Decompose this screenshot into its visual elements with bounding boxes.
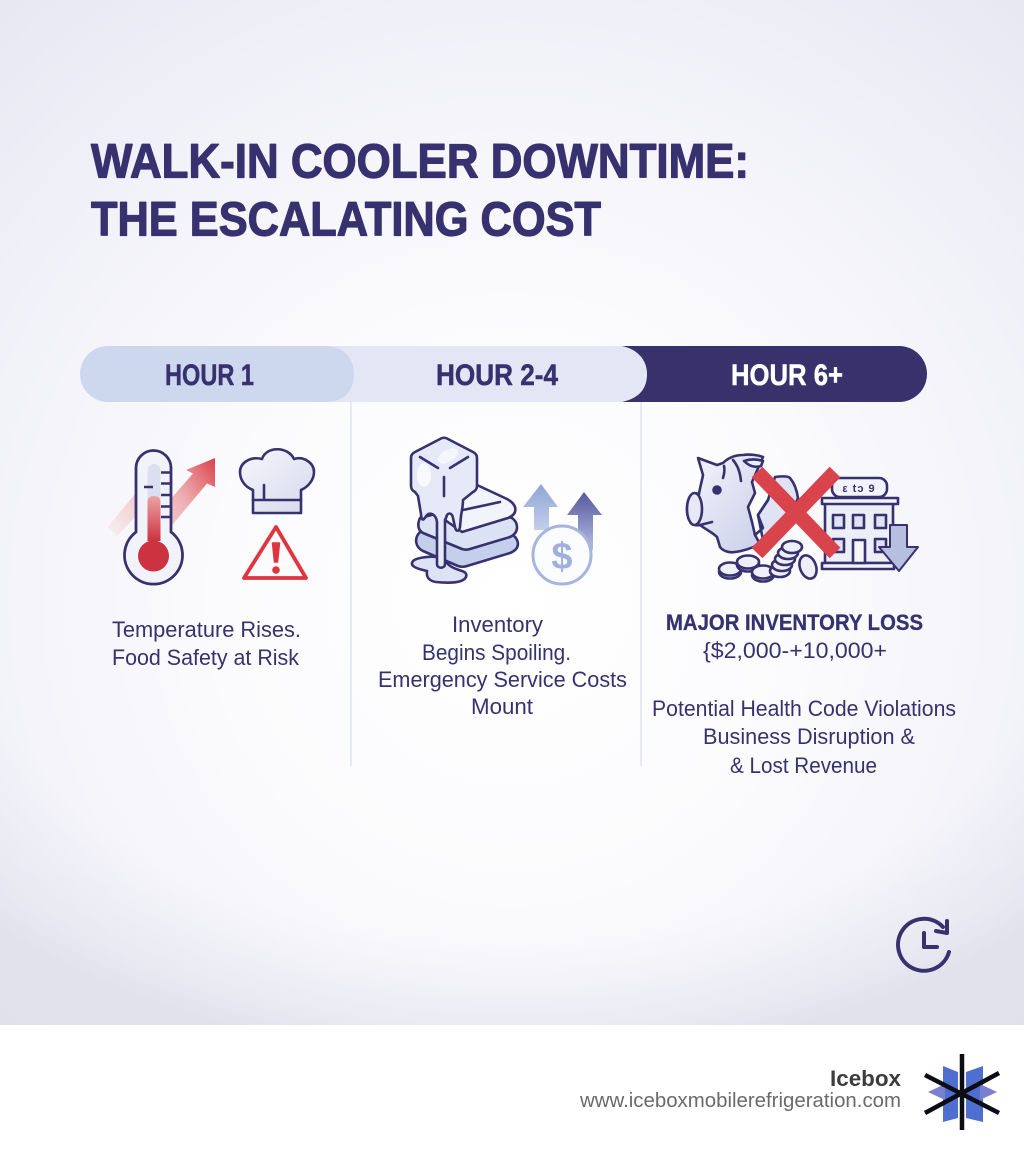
segment: hour 6+ [610, 346, 927, 402]
icon: snowflake logo [925, 1054, 999, 1130]
icon: down arrow [879, 525, 918, 571]
segment: hour 6+: HOUR 6+ [731, 359, 843, 392]
icon: chef hat [240, 449, 314, 513]
segment: hour 1: HOUR 1 [165, 359, 254, 392]
timeline bar [80, 346, 927, 402]
icon: melting ice and spoiling inventory [411, 438, 602, 584]
text: hour 2-4 description: Mount [471, 694, 533, 719]
icon: inventory stack [416, 485, 518, 567]
icon: dollar coin: $ [551, 536, 573, 578]
icon: melting ice cube [411, 438, 477, 568]
icon: warning triangle [244, 527, 306, 578]
icon: puddle [412, 557, 466, 583]
icon: rising arrow [108, 458, 215, 536]
footer website: www.iceboxmobilerefrigeration.com [579, 1090, 901, 1112]
text: hour 6+ description [652, 610, 956, 778]
icon: piggy bank [687, 455, 798, 552]
text: hour 1 description [112, 617, 301, 670]
text: hour 6+ description: Potential Health Code Violations [652, 696, 956, 721]
icon: coins [719, 541, 820, 582]
icon: clock [898, 919, 949, 971]
icon: dollar coin [533, 526, 591, 584]
footer panel [0, 1025, 1024, 1154]
icon: building: ε tɔ 9 [842, 483, 876, 495]
text: hour 6+ description: & Lost Revenue [730, 753, 877, 778]
title [91, 136, 749, 246]
title: THE ESCALATING COST [91, 194, 601, 246]
text: hour 1 description: Temperature Rises. [112, 617, 301, 642]
icon: rising temperature thermometer [108, 450, 215, 584]
text: hour 1 description: Food Safety at Risk [112, 645, 300, 670]
icon: rising cost arrows [523, 484, 602, 550]
text: hour 2-4 description: Emergency Service Costs [378, 667, 627, 692]
text: hour 2-4 description: Begins Spoiling. [422, 640, 571, 665]
segment: hour 1 [80, 346, 354, 402]
segment: hour 2-4 [320, 346, 647, 402]
text: hour 6+ description: Business Disruption & [703, 724, 915, 749]
title: WALK-IN COOLER DOWNTIME: [91, 136, 749, 188]
footer brand name: Icebox [830, 1066, 902, 1091]
icon: red cross [757, 472, 835, 553]
icon: broken piggy bank, coins and closed building [687, 455, 918, 582]
segment: hour 2-4: HOUR 2-4 [436, 359, 558, 392]
text: hour 2-4 description: Inventory [452, 612, 543, 637]
text: hour 6+ description: MAJOR INVENTORY LOSS [666, 610, 923, 635]
text: hour 2-4 description [378, 612, 627, 719]
icon: building [822, 478, 898, 569]
icon: thermometer [124, 450, 182, 584]
text: hour 6+ description: {$2,000-+10,000+ [703, 638, 887, 663]
